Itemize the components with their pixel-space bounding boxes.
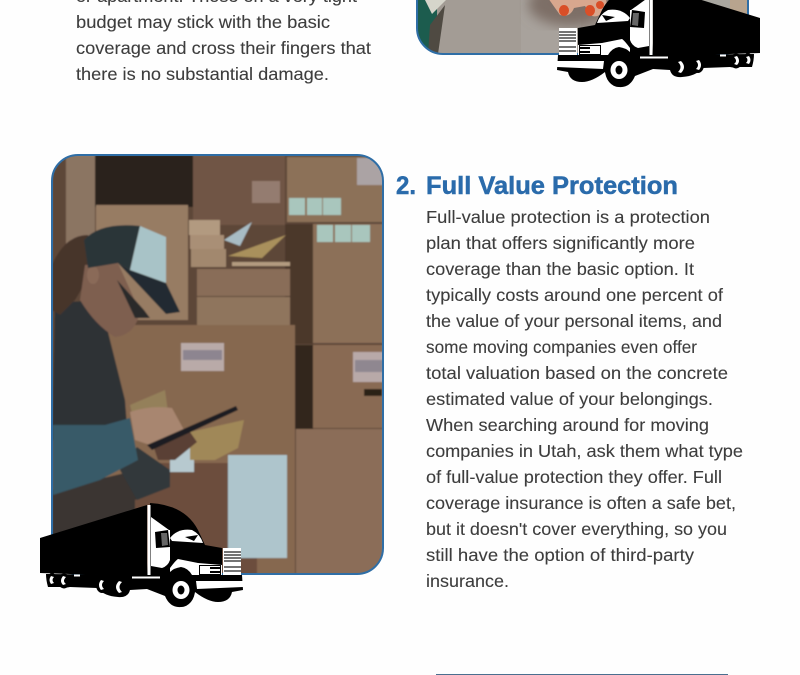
text block: full value protection description: plan that offers significantly more bbox=[426, 233, 695, 253]
text block: full value protection description: the value of your personal items, and bbox=[426, 311, 722, 331]
text block: full value protection description: typically costs around one percent of bbox=[426, 285, 723, 305]
heading: Full Value Protection: 2. bbox=[396, 172, 416, 200]
photo: next section top edge bbox=[436, 674, 728, 675]
text block: full value protection description: When searching around for moving bbox=[426, 415, 709, 435]
text block: intro paragraph end: budget may stick with the basic bbox=[76, 12, 330, 32]
text block: full value protection description: total valuation based on the concrete bbox=[426, 363, 728, 383]
text block: full value protection description: Full-value protection is a protection bbox=[426, 207, 710, 227]
text block: full value protection description: estimated value of your belongings. bbox=[426, 389, 713, 409]
icon: truck facing right (over photo) bbox=[40, 503, 243, 607]
text block: full value protection description bbox=[426, 207, 743, 591]
text block: intro paragraph end: coverage and cross their fingers that bbox=[76, 38, 371, 58]
text block: full value protection description: insurance. bbox=[426, 571, 509, 591]
photo: hands on a box (top right) bbox=[417, 0, 748, 56]
text block: intro paragraph end: there is no substantial damage. bbox=[76, 64, 329, 84]
text block: full value protection description: but it doesn't cover everything, so you bbox=[426, 519, 727, 539]
photo: woman with tablet among boxes bbox=[52, 155, 383, 575]
icon: truck facing left (top right) bbox=[557, 0, 760, 87]
text block: full value protection description: coverage insurance is often a safe bet, bbox=[426, 493, 736, 513]
text block: full value protection description: still have the option of third-party bbox=[426, 545, 694, 565]
text block: full value protection description: some moving companies even offer bbox=[426, 337, 697, 357]
text block: full value protection description: of full-value protection they offer. Full bbox=[426, 467, 722, 487]
text block: full value protection description: coverage than the basic option. It bbox=[426, 259, 694, 279]
text block: intro paragraph end bbox=[76, 0, 371, 84]
heading: Full Value Protection: Full Value Protection bbox=[426, 172, 678, 200]
person bbox=[52, 300, 128, 440]
text block: full value protection description: companies in Utah, ask them what type bbox=[426, 441, 743, 461]
